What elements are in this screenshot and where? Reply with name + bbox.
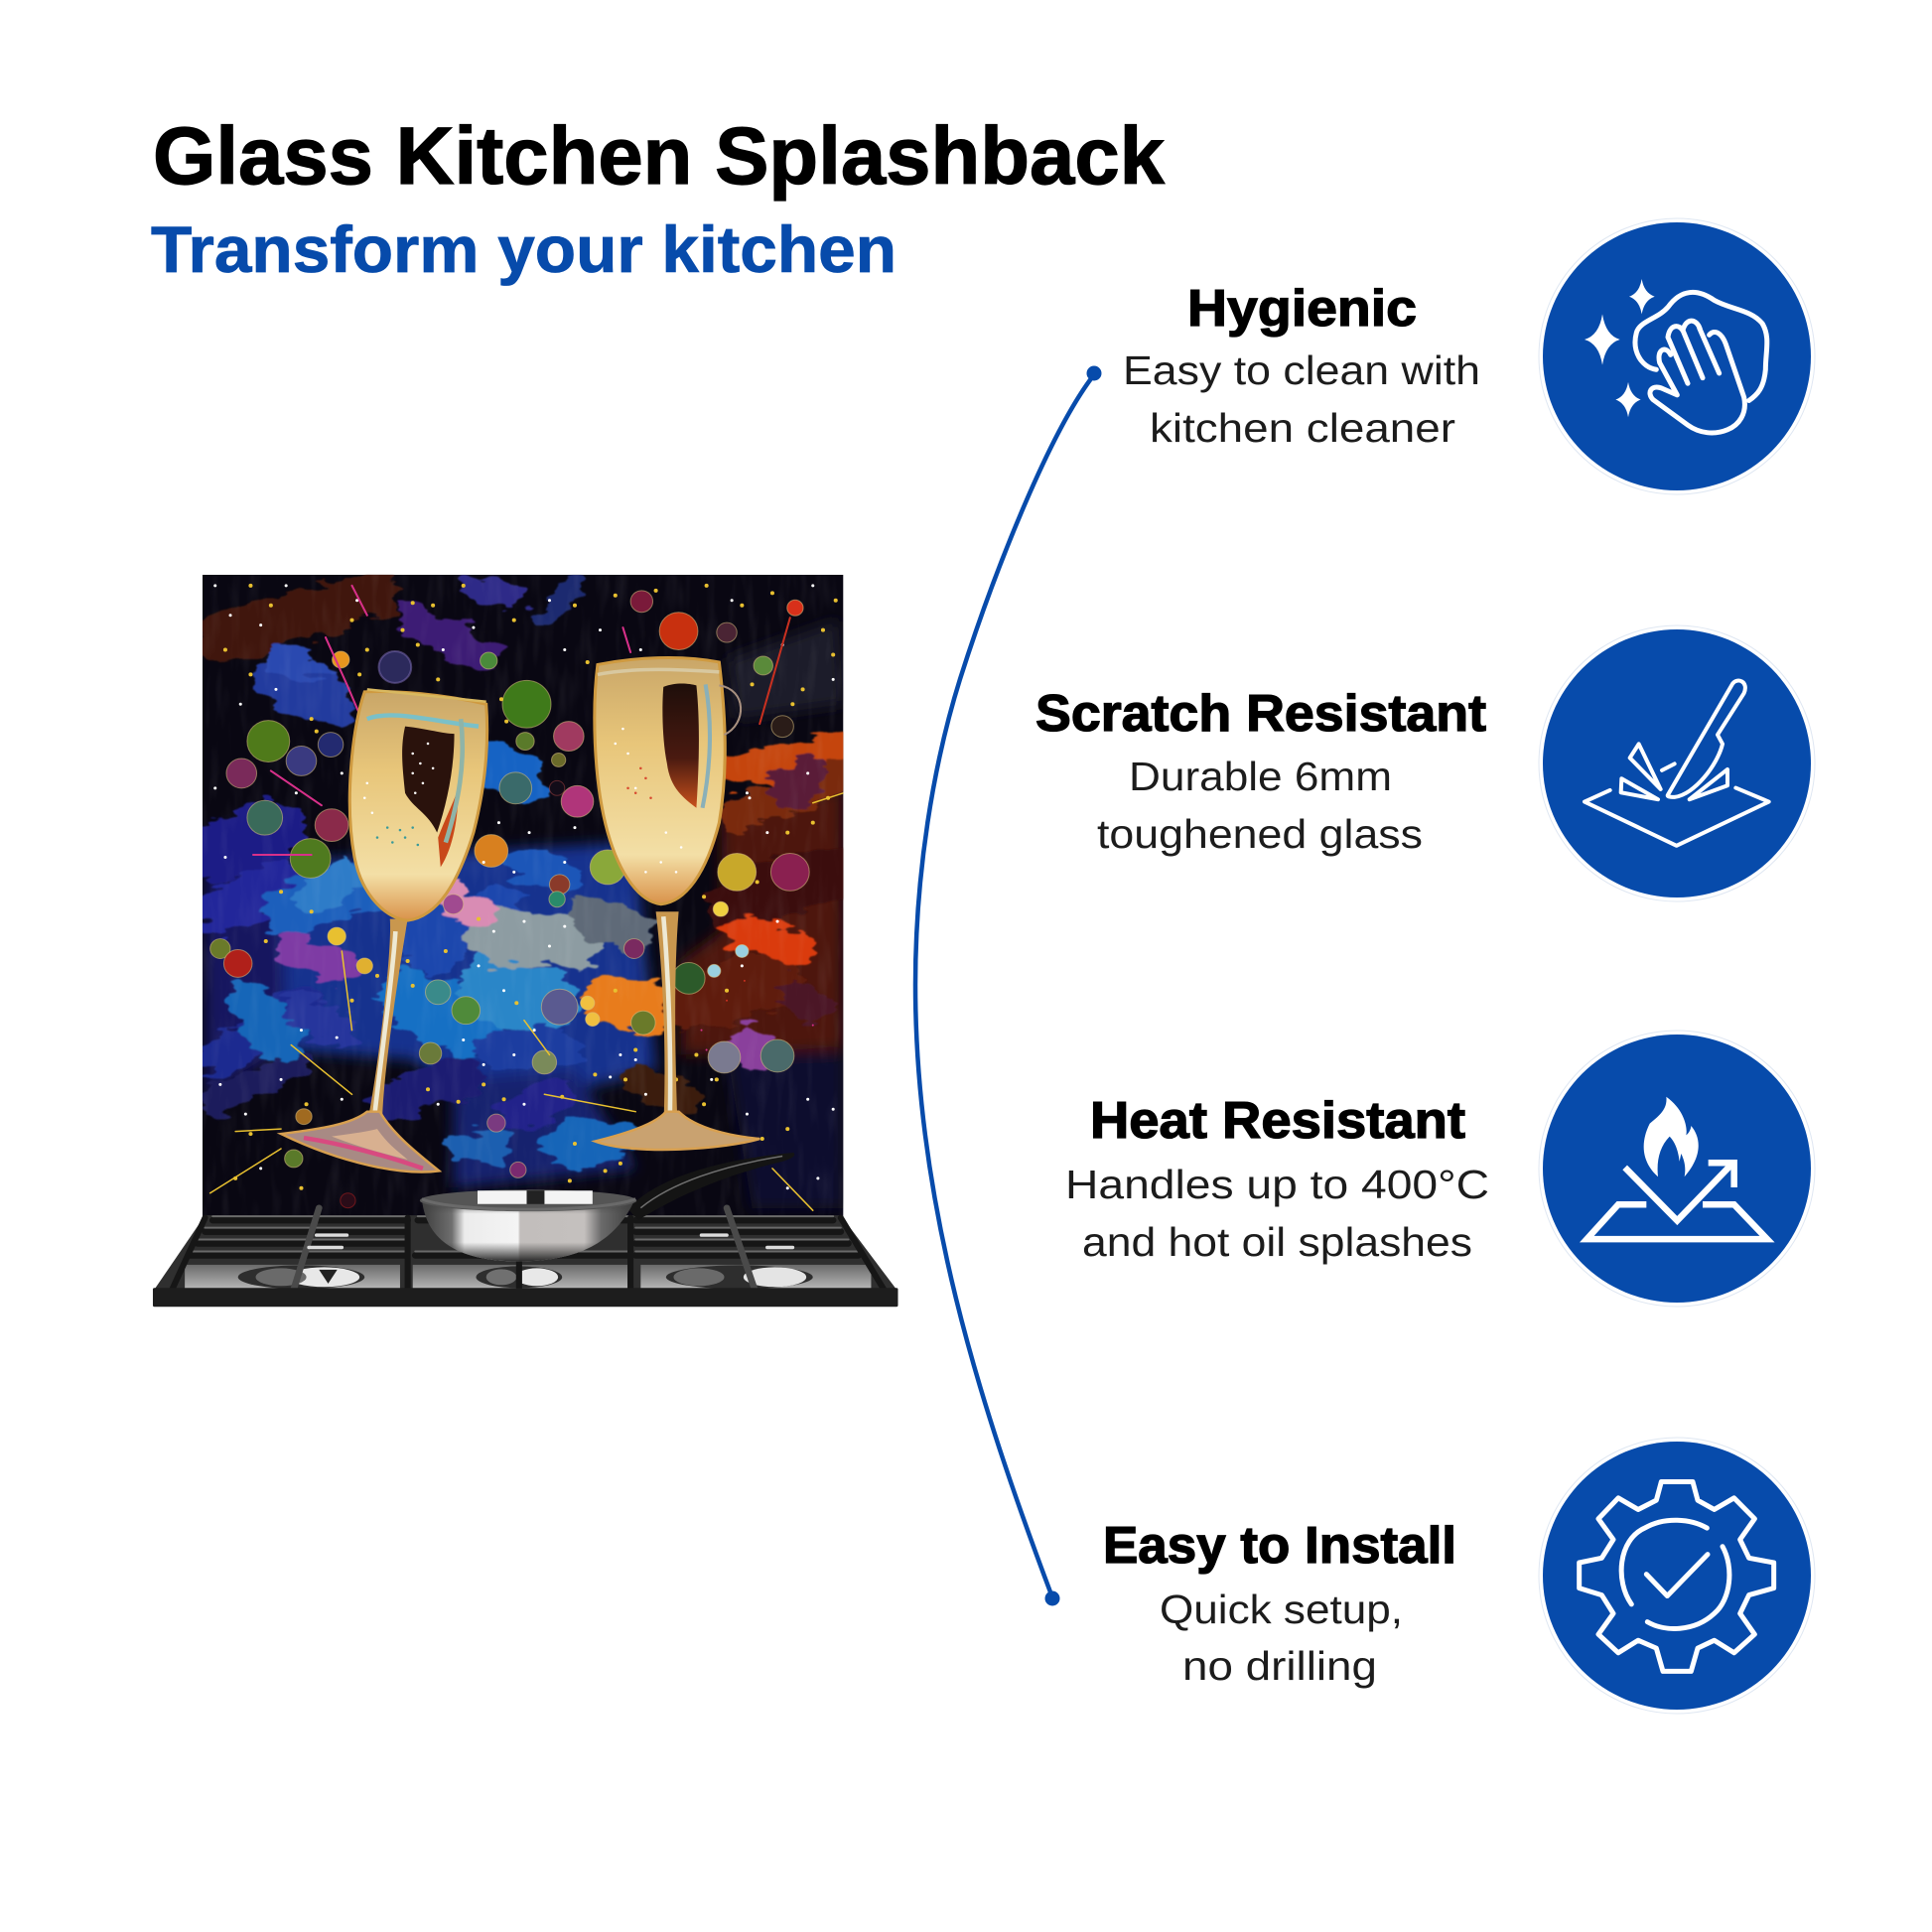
grates [172,1208,884,1290]
subtitle: Transform your kitchen [151,212,897,286]
feature: Easy to Install: Quick setup, [1160,1587,1403,1632]
feature: Hygienic: kitchen cleaner [1150,405,1455,451]
feature: Easy to Install: no drilling [1182,1643,1377,1689]
brush texture [203,575,843,1217]
feature: Heat Resistant: Heat Resistant [1090,1092,1465,1150]
connector curve [915,365,1102,1606]
feature: Heat Resistant [1065,1092,1489,1265]
feature: Scratch Resistant: Scratch Resistant [1035,685,1486,743]
hob front edge [153,1288,897,1307]
icon: gear with check mark [1539,1438,1815,1714]
icon: hand wiping with cloth [1539,218,1815,494]
burners [238,1265,813,1289]
feature: Easy to Install: Easy to Install [1103,1517,1456,1575]
icon: knife scratching glass [1539,625,1815,901]
frying pan [420,1153,794,1261]
hob: gas cooktop [153,1208,897,1307]
feature: Scratch Resistant [1035,685,1486,857]
panel: splashback artwork [203,575,843,1217]
paint splatter [210,586,843,1210]
connector dot: bottom [1044,1590,1060,1606]
connector dot: top [1086,365,1102,381]
feature: Easy to Install [1103,1517,1456,1689]
bubbles [210,591,809,1208]
feature: Heat Resistant: and hot oil splashes [1082,1219,1472,1265]
feature: Hygienic: Easy to clean with [1123,347,1480,393]
product image: splashback artwork above a gas hob [153,575,897,1307]
icon: flame with heat reflected off a surface [1539,1031,1815,1307]
feature: Hygienic: Hygienic [1187,280,1417,338]
title: Glass Kitchen Splashback [153,111,1165,202]
feature: Scratch Resistant: toughened glass [1097,811,1423,857]
feature: Hygienic [1123,280,1480,451]
glass: right champagne flute [595,657,759,1150]
feature: Scratch Resistant: Durable 6mm [1129,754,1392,799]
feature: Heat Resistant: Handles up to 400°C [1065,1162,1489,1207]
glass: left champagne flute [281,689,487,1172]
